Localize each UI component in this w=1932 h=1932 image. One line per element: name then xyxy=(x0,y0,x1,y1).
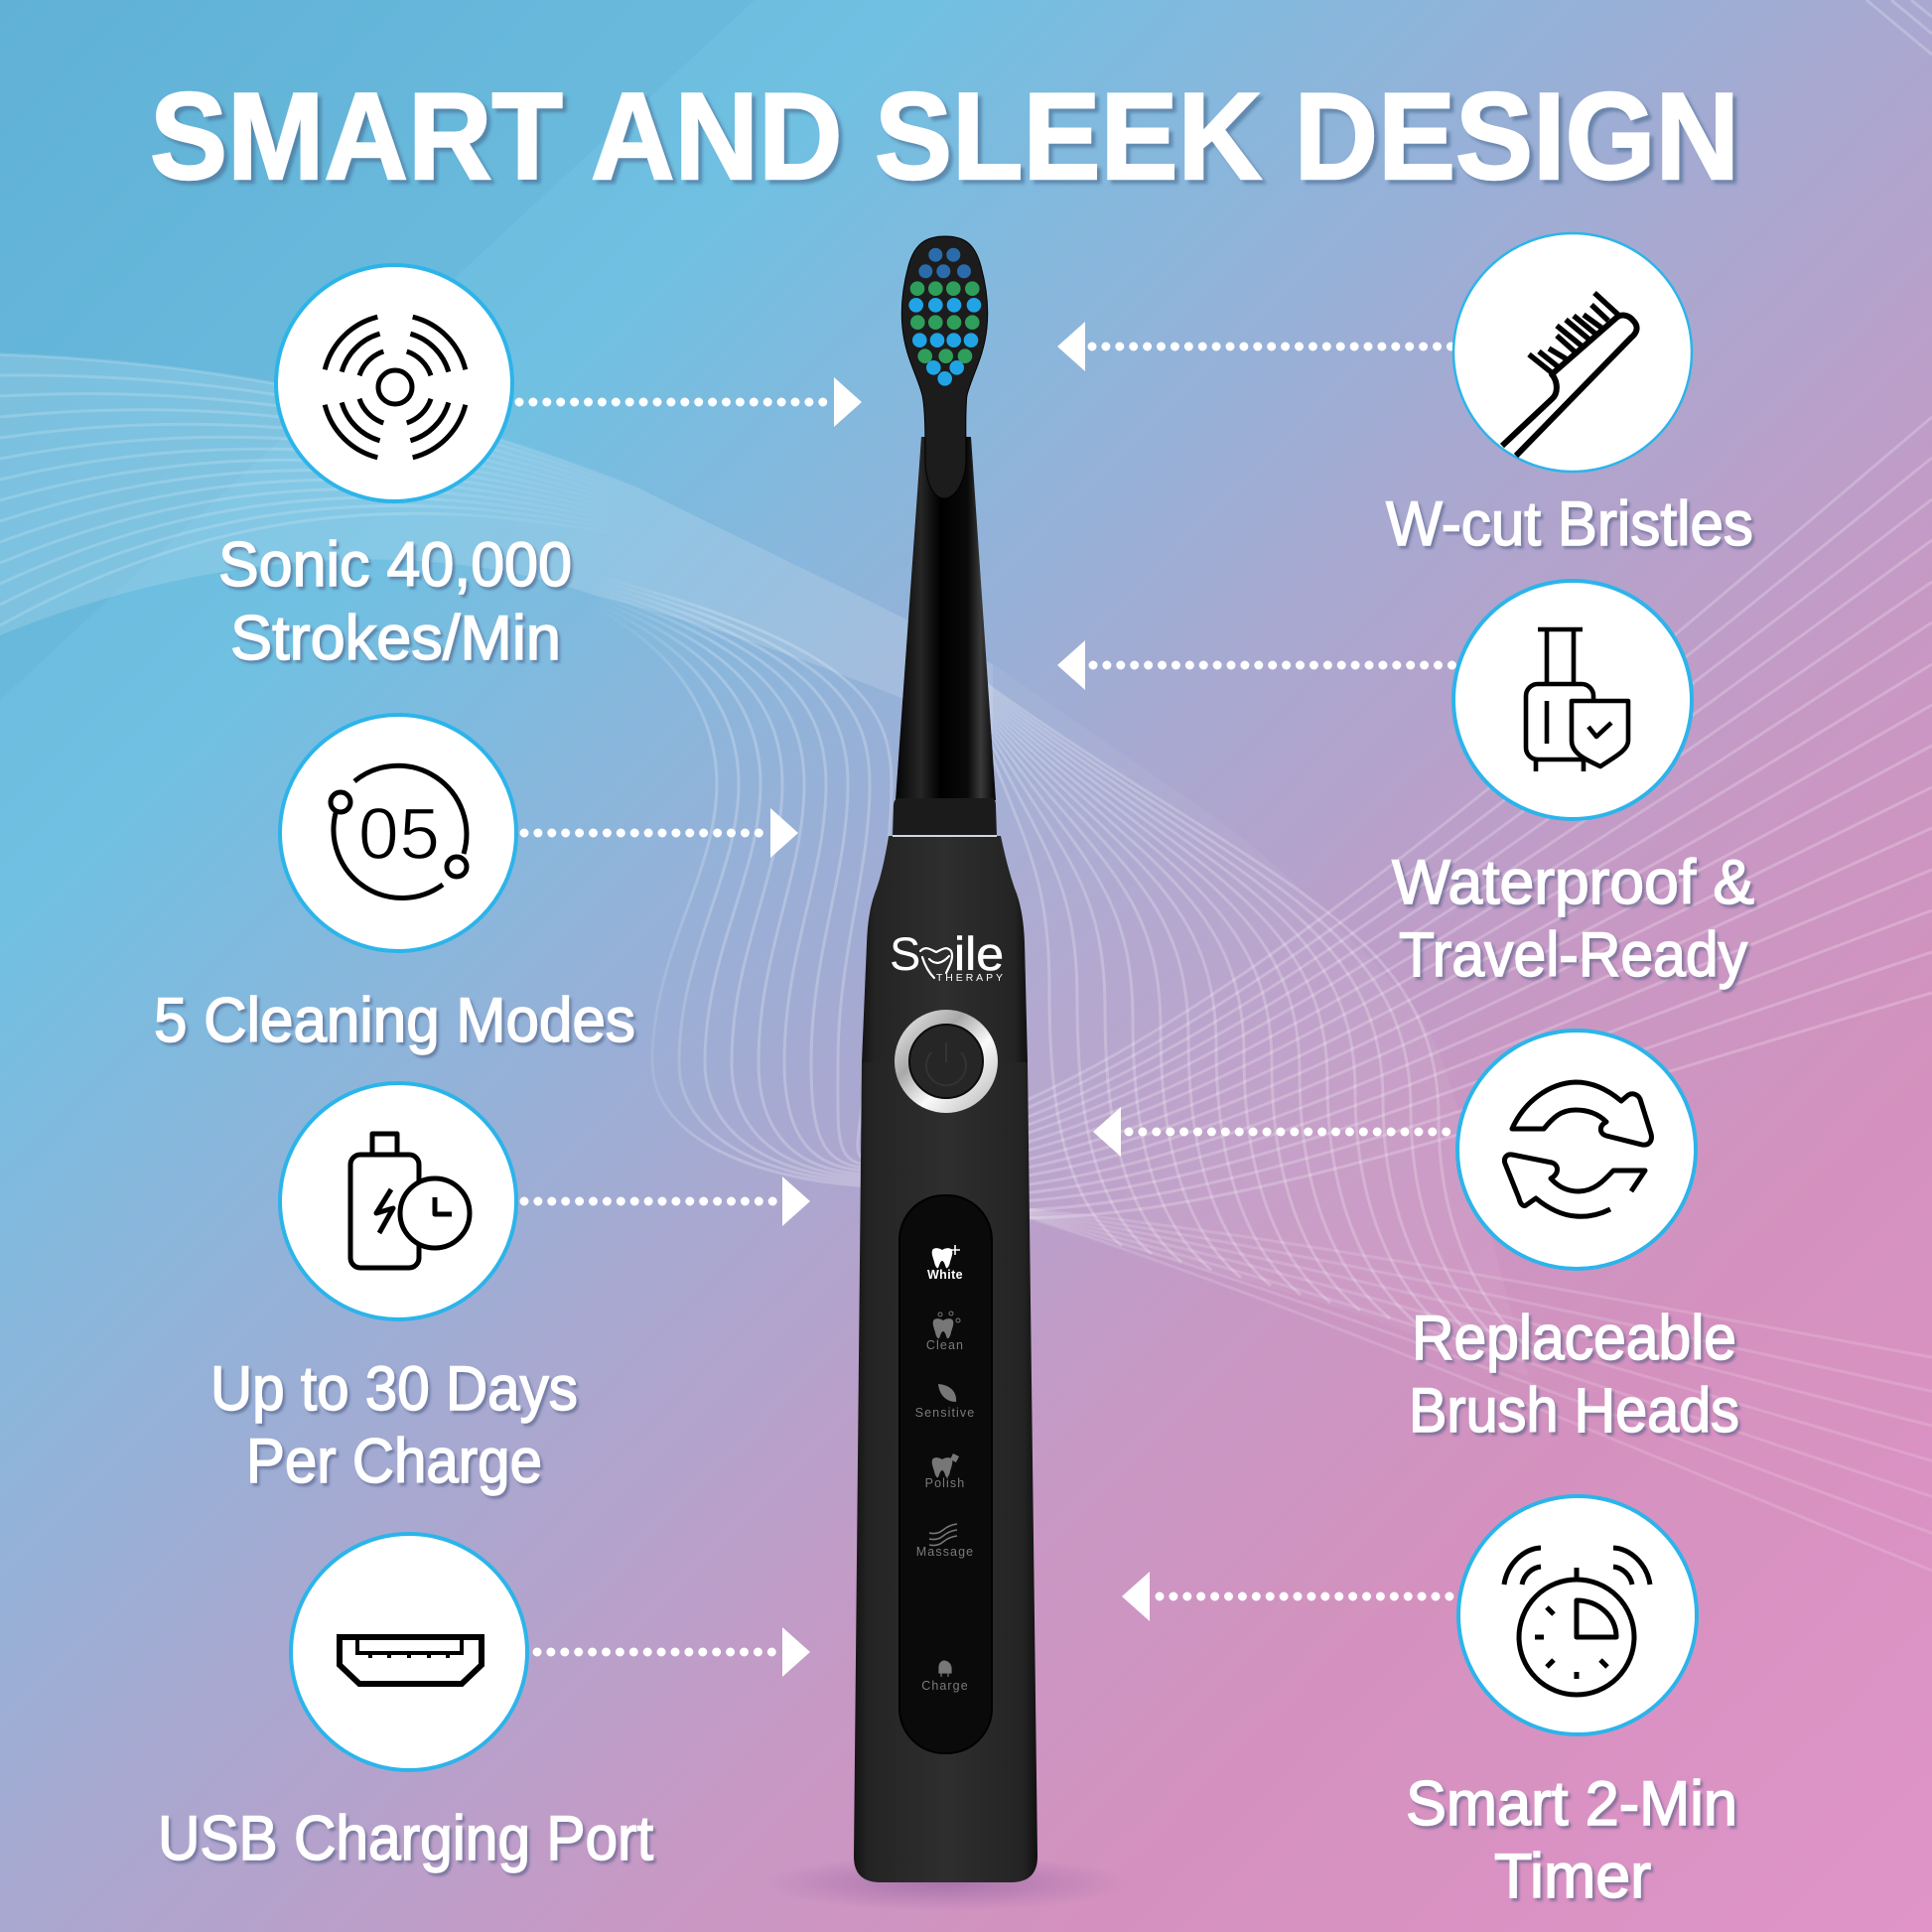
label: replaceable: Replaceable xyxy=(1412,1304,1736,1373)
logo: THERAPY xyxy=(936,972,1003,984)
background: mesh light area xyxy=(993,664,1529,1377)
label: sonic xyxy=(218,530,572,673)
label: replaceable xyxy=(1409,1304,1739,1446)
toothbrush shaft xyxy=(896,437,996,800)
mode: Charge: Charge xyxy=(921,1679,969,1693)
icon circle: battery xyxy=(280,1083,516,1319)
arrow: waterproof xyxy=(1057,640,1455,690)
arrow: timer xyxy=(1122,1572,1453,1621)
label: waterproof: Waterproof & xyxy=(1392,848,1754,917)
icon circle: bristles xyxy=(1453,233,1692,472)
background: light wave xyxy=(0,354,993,735)
background: dark corner wedge xyxy=(0,0,755,700)
arrow: battery xyxy=(524,1176,810,1226)
icon circle: sonic xyxy=(276,265,512,501)
label: timer xyxy=(1406,1769,1737,1911)
label: sonic: Sonic 40,000 xyxy=(218,530,572,600)
toothbrush ground shadow xyxy=(762,1856,1130,1911)
icon circle: usb xyxy=(291,1534,527,1770)
feature: battery xyxy=(210,1083,810,1496)
mode: White: White xyxy=(927,1268,963,1282)
feature: cleaning modes xyxy=(154,715,798,1055)
label: sonic: Strokes/Min xyxy=(230,604,561,673)
feature: usb xyxy=(158,1534,810,1873)
feature: timer xyxy=(1122,1496,1737,1911)
handle body xyxy=(854,836,1037,1882)
logo: ile xyxy=(954,927,1004,980)
label: bristles: W-cut Bristles xyxy=(1386,489,1753,559)
brush head xyxy=(901,236,988,498)
logo xyxy=(890,927,1004,984)
label: timer: Smart 2-Min xyxy=(1406,1769,1737,1839)
arrow: bristles xyxy=(1057,322,1451,371)
icon circle: 05: 05 xyxy=(358,794,440,875)
label: battery: Per Charge xyxy=(246,1427,542,1496)
icon circle: 05 xyxy=(280,715,516,951)
title: SMART AND SLEEK DESIGN xyxy=(150,69,1739,206)
mode: Polish xyxy=(925,1453,965,1490)
mode panel xyxy=(899,1195,992,1753)
arrow: usb xyxy=(537,1627,810,1677)
feature: bristles xyxy=(1057,233,1753,559)
arrow: sonic xyxy=(519,377,862,427)
label: waterproof xyxy=(1392,848,1754,990)
toothbrush product xyxy=(762,236,1130,1911)
mode: Massage: Massage xyxy=(916,1545,974,1559)
feature: replaceable heads xyxy=(1093,1031,1739,1446)
feature: sonic strokes xyxy=(218,265,862,673)
feature: waterproof xyxy=(1057,581,1754,990)
label: timer: Timer xyxy=(1494,1842,1651,1911)
icon circle: refresh xyxy=(1457,1031,1696,1269)
icon circle: timer xyxy=(1458,1496,1697,1734)
mode: White xyxy=(927,1245,963,1282)
label: usb: USB Charging Port xyxy=(158,1804,653,1873)
mode: Sensitive xyxy=(915,1384,975,1420)
label: battery xyxy=(210,1354,578,1496)
mode: Massage xyxy=(916,1524,974,1559)
mode: Polish: Polish xyxy=(925,1476,965,1490)
arrow: replaceable xyxy=(1093,1107,1451,1157)
label: modes: 5 Cleaning Modes xyxy=(154,986,635,1055)
mode: Clean xyxy=(926,1311,964,1352)
bristles xyxy=(908,248,981,386)
power button xyxy=(895,1010,998,1113)
mode: Sensitive: Sensitive xyxy=(915,1406,975,1420)
arrow: modes xyxy=(524,808,798,858)
toothbrush collar xyxy=(893,798,997,836)
mode: Clean: Clean xyxy=(926,1338,964,1352)
mode: Charge xyxy=(921,1661,969,1693)
logo: S xyxy=(890,927,920,980)
label: waterproof: Travel-Ready xyxy=(1399,920,1747,990)
label: replaceable: Brush Heads xyxy=(1409,1376,1739,1446)
icon circle: luggage xyxy=(1453,581,1692,819)
label: battery: Up to 30 Days xyxy=(210,1354,578,1424)
